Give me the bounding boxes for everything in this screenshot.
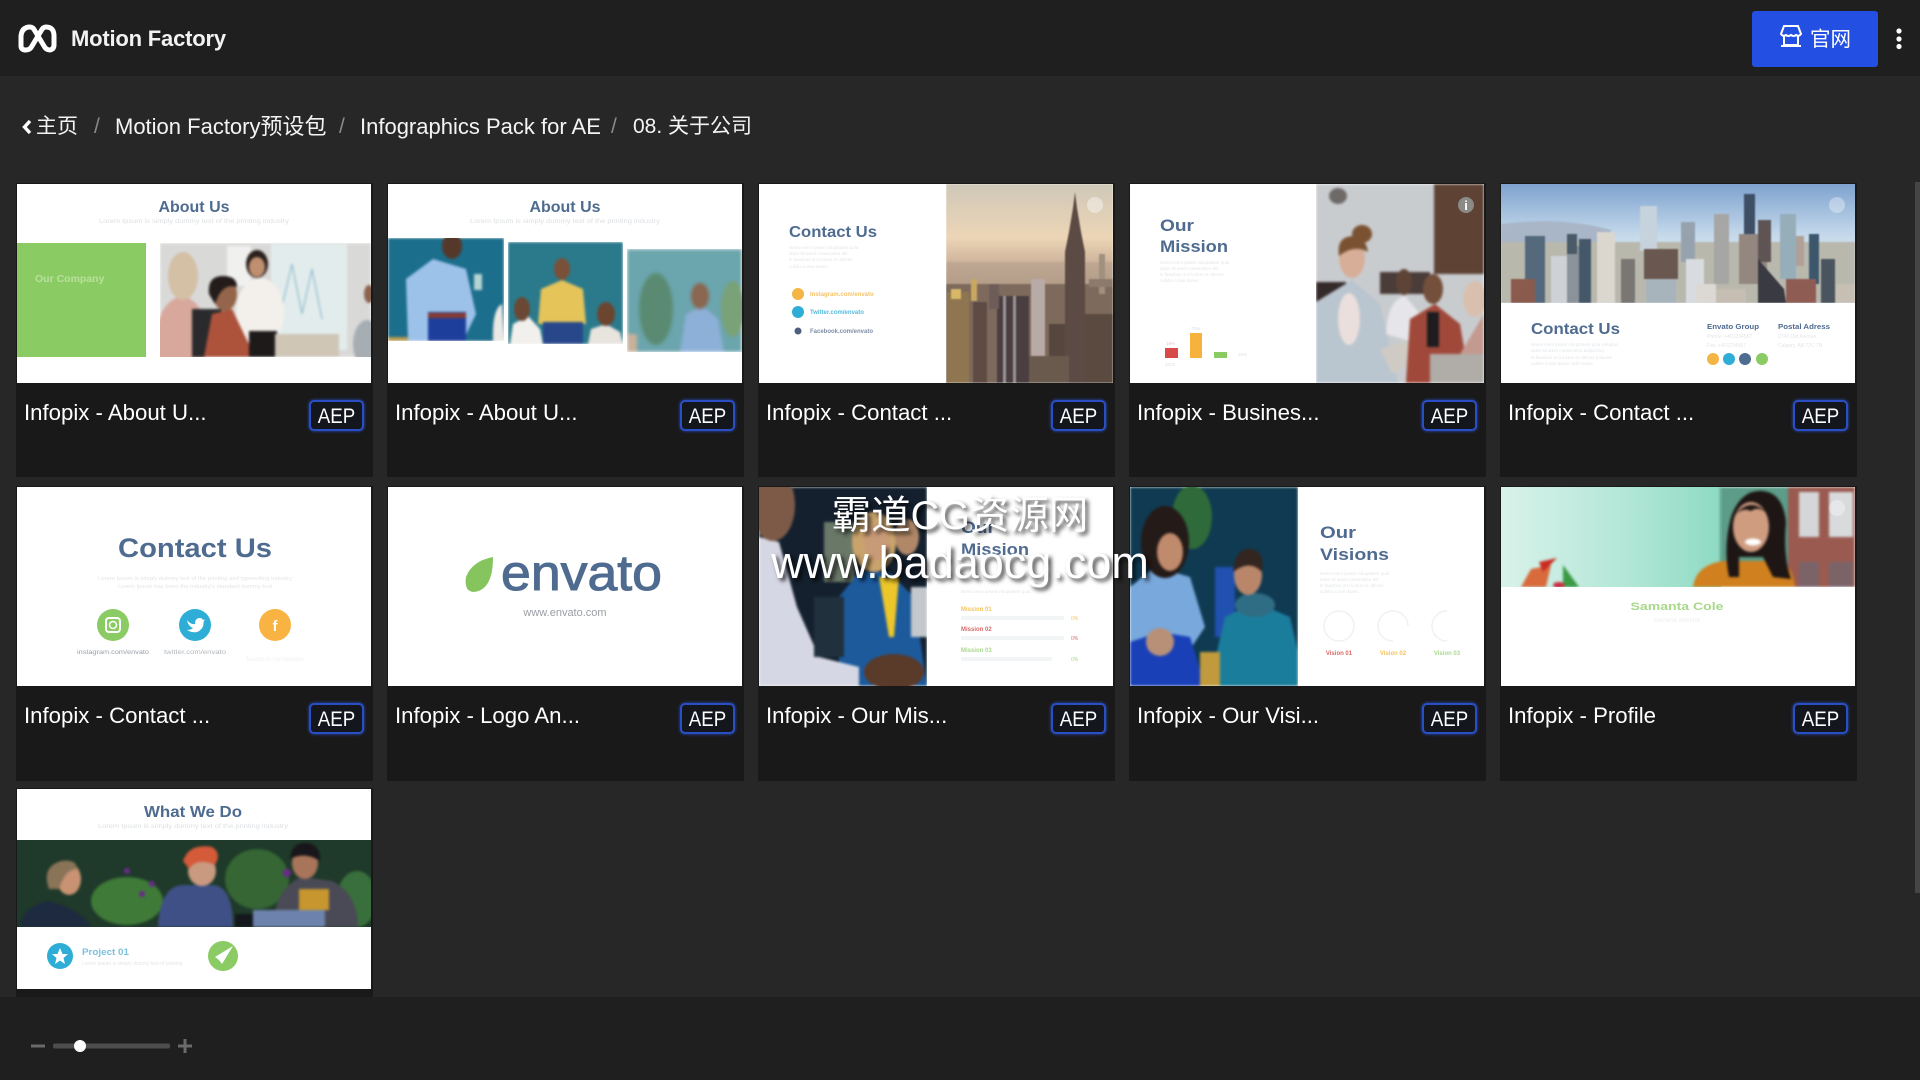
card title: Infopix - Contact ... <box>766 400 952 425</box>
thumbnail: About Us with green panel and meeting photo: Lorem Ipsum is simply dummy text of the printing industry <box>99 219 289 225</box>
thumbnail: Our Visions with rings: dolor sit amet consectetur elit <box>1320 577 1379 582</box>
badge: AEP: AEP <box>318 404 355 428</box>
thumbnail: Contact Us with city panorama: Postal Adress <box>1778 324 1830 331</box>
card title: Infopix - Busines... <box>1137 400 1320 425</box>
badge: AEP <box>1422 703 1477 734</box>
card: Contact 3 <box>16 486 373 781</box>
breadcrumb: Motion Factory预设包 <box>115 114 326 139</box>
thumbnail: Contact Us with skyline photo: Nemo enim ipsam voluptatem quia <box>789 245 859 250</box>
badge: AEP <box>1051 703 1106 734</box>
thumbnail: Our Mission with bars and photo: 2019 <box>1165 362 1176 367</box>
button: official site <box>1752 11 1878 67</box>
badge: AEP: AEP <box>1431 707 1468 731</box>
thumbnail: Contact Us with skyline photo: cubilia curae donec <box>789 264 829 269</box>
thumbnail: Contact Us with city panorama: Envato Group <box>1707 324 1759 331</box>
thumbnail: Contact Us with skyline photo: Twitter.com/envato <box>810 310 864 316</box>
header bar <box>0 0 1920 76</box>
thumbnail: Our Visions with rings: Visions <box>1320 546 1389 564</box>
thumbnail: Contact Us with city panorama: cubilia curae donec velit neque <box>1531 361 1593 366</box>
card: About Us 1 <box>16 183 373 477</box>
card title: Infopix - Our Visi... <box>1137 703 1319 728</box>
card: Logo Animation <box>387 486 744 781</box>
thumbnail: What We Do team photo: What We Do <box>144 804 242 821</box>
thumbnail: Our Mission with bars and photo: 25% <box>1238 352 1247 357</box>
thumbnail: Our Mission with bars and photo: i <box>1464 198 1468 213</box>
thumbnail: Our Visions with rings: Vision 02 <box>1380 651 1407 657</box>
thumbnail: Contact Us with three social icons: instagram.com/envato <box>77 649 149 656</box>
icon: back chevron <box>22 120 32 134</box>
badge: AEP <box>1051 400 1106 431</box>
thumbnail: envato logo: envato <box>501 545 662 601</box>
thumbnail: Contact Us with three social icons <box>17 487 371 686</box>
thumbnail: Our Visions with rings: in faucibus orci luctus et ultrices <box>1320 583 1384 588</box>
thumbnail: What We Do team photo: Lorem Ipsum is simply dummy text of the printing industry <box>98 824 288 830</box>
thumbnail: Our Mission with progress bars: Mission <box>961 541 1029 559</box>
thumbnail: Contact Us with city panorama: Contact Us <box>1531 321 1620 338</box>
icon: store <box>1780 25 1802 47</box>
badge: AEP: AEP <box>318 707 355 731</box>
breadcrumb: 主页 <box>36 115 78 138</box>
thumbnail: Contact Us with city panorama: in faucibus orci luctus et ultrices posuere <box>1531 355 1613 360</box>
thumbnail: Contact Us with city panorama <box>1501 184 1855 383</box>
thumbnail: Contact Us with three social icons: Lorem Ipsum is simply dummy text of the printing and typesetting industry <box>98 576 293 582</box>
card: About Us 2 <box>387 183 744 477</box>
thumbnail: Our Mission with progress bars: Nemo enim ipsam voluptatem quia <box>961 589 1031 594</box>
thumbnail: About Us with green panel and meeting photo: Our Company <box>35 273 105 285</box>
thumbnail: Contact Us with city panorama: 2745 Old Avenue <box>1778 334 1816 340</box>
thumbnail: Contact Us with skyline photo <box>759 184 1113 383</box>
card title: Infopix - Our Mis... <box>766 703 947 728</box>
thumbnail: Contact Us with skyline photo: in faucibus orci luctus et ultrices <box>789 257 853 262</box>
thumbnail: Contact Us with three social icons: Contact Us <box>118 533 272 563</box>
thumbnail: Contact Us with skyline photo: Instagram.com/envato <box>810 292 874 298</box>
thumbnail: Our Mission with progress bars: 0% <box>1071 657 1079 663</box>
thumbnail: About Us with three team photos: About Us <box>530 199 600 216</box>
thumbnail: Our Visions with rings: cubilia curae donec <box>1320 589 1360 594</box>
badge: AEP <box>680 703 735 734</box>
thumbnail: Our Mission with bars and photo <box>1130 184 1484 383</box>
card title: Infopix - Logo An... <box>395 703 580 728</box>
thumbnail: Our Mission with bars and photo: dolor sit amet consectetur elit <box>1160 266 1219 271</box>
thumbnail: Contact Us with three social icons: facebook.com/envato <box>246 657 304 663</box>
badge: AEP <box>309 400 364 431</box>
breadcrumb: / <box>339 115 345 138</box>
thumbnail: envato logo <box>388 487 742 686</box>
thumbnail: Our Visions with rings: Vision 03 <box>1434 651 1461 657</box>
thumbnail: Our Mission with progress bars: 0% <box>1071 616 1079 622</box>
watermark <box>771 494 1152 594</box>
thumbnail: Our Mission with progress bars: Mission 01 <box>961 607 992 613</box>
badge: AEP: AEP <box>1060 707 1097 731</box>
card: What We Do <box>16 788 373 997</box>
thumbnail: Our Mission with bars and photo: Our <box>1160 217 1195 235</box>
thumbnail: Our Mission with progress bars <box>759 487 1113 686</box>
zoom slider <box>31 1039 192 1053</box>
thumbnail: Contact Us with three social icons: Lorem Ipsum has been the industry's standard dummy text <box>118 584 273 590</box>
badge: AEP: AEP <box>1802 707 1839 731</box>
card title: Infopix - About U... <box>395 400 578 425</box>
thumbnail: Our Visions with rings: Vision 01 <box>1326 651 1353 657</box>
thumbnail: About Us with three team photos <box>388 184 742 383</box>
card: Contact 2 <box>1500 183 1857 477</box>
badge: AEP: AEP <box>1431 404 1468 428</box>
thumbnail: What We Do team photo <box>17 789 371 989</box>
thumbnail: Contact Us with skyline photo: Facebook.com/envato <box>810 329 873 335</box>
thumbnail: Contact Us with three social icons: twitter.com/envato <box>164 649 226 656</box>
breadcrumb: / <box>94 115 100 138</box>
card: Our Mission <box>758 486 1115 781</box>
card: Business Mission <box>1129 183 1486 477</box>
badge: AEP: AEP <box>1060 404 1097 428</box>
watermark: www.badaocg.com <box>771 537 1149 588</box>
card: Contact 1 <box>758 183 1115 477</box>
breadcrumb <box>22 114 752 139</box>
thumbnail: Our Mission with bars and photo: Mission <box>1160 238 1228 256</box>
thumbnail: Our Mission with bars and photo: cubilia curae donec <box>1160 278 1200 283</box>
badge: AEP: AEP <box>689 404 726 428</box>
thumbnail: Contact Us with city panorama: Nemo enim ipsam voluptatem quia voluptas <box>1531 342 1619 347</box>
thumbnail: About Us with green panel and meeting photo: About Us <box>158 199 230 216</box>
brand name: Motion Factory <box>71 26 226 51</box>
thumbnail: Our Visions with rings <box>1130 487 1484 686</box>
breadcrumb: 08. 关于公司 <box>633 115 752 138</box>
icon: more menu <box>1896 28 1902 50</box>
thumbnail: About Us with three team photos: Lorem Ipsum is simply dummy text of the printing industry <box>470 219 660 225</box>
card title: Infopix - Contact ... <box>1508 400 1694 425</box>
thumbnail: Our Mission with progress bars: 0% <box>1071 636 1079 642</box>
card: Profile <box>1500 486 1857 781</box>
icon: Motion Factory logo <box>18 24 56 52</box>
card title: Infopix - Profile <box>1508 703 1656 728</box>
card title: Infopix - About U... <box>24 400 207 425</box>
badge: AEP <box>309 703 364 734</box>
card title: Infopix - Contact ... <box>24 703 210 728</box>
thumbnail: Our Mission with progress bars: Mission 02 <box>961 627 992 633</box>
card: Our Visions <box>1129 486 1486 781</box>
thumbnail: Contact Us with skyline photo: Contact Us <box>789 224 877 241</box>
footer bar <box>0 997 1920 1080</box>
thumbnail: Our Mission with bars and photo: 72% <box>1191 326 1200 331</box>
button label: 官网 <box>1810 28 1851 51</box>
thumbnail: Contact Us with city panorama: dolor sit amet consectetur adipiscing <box>1531 348 1604 353</box>
thumbnail: Contact Us with skyline photo: dolor sit amet consectetur elit <box>789 251 848 256</box>
thumbnail: Samanta Cole profile <box>1501 487 1855 686</box>
thumbnail: Samanta Cole profile: General director <box>1654 617 1701 624</box>
badge: AEP <box>1422 400 1477 431</box>
thumbnail: What We Do team photo: Project 01 <box>82 947 129 957</box>
thumbnail: Our Mission with bars and photo: in faucibus orci luctus et ultrices <box>1160 272 1224 277</box>
thumbnail: Our Visions with rings: Nemo enim ipsam voluptatem quia <box>1320 571 1390 576</box>
scrollbar <box>1915 182 1920 893</box>
thumbnail: Our Mission with bars and photo: 16% <box>1166 341 1175 346</box>
thumbnail: Samanta Cole profile: Samanta Cole <box>1630 601 1724 613</box>
breadcrumb: Infographics Pack for AE <box>360 114 601 139</box>
badge: AEP: AEP <box>1802 404 1839 428</box>
thumbnail: What We Do team photo: Lorem Ipsum is simply dummy text of printing <box>82 961 183 967</box>
watermark: 霸道CG资源网 <box>832 494 1088 538</box>
badge: AEP <box>1793 400 1848 431</box>
badge: AEP: AEP <box>689 707 726 731</box>
thumbnail: Contact Us with city panorama: Phone: +401234567 <box>1707 334 1752 340</box>
thumbnail: Our Visions with rings: Our <box>1320 524 1357 542</box>
badge: AEP <box>680 400 735 431</box>
thumbnail: Contact Us with city panorama: Calgary, AB T2C 7B <box>1778 343 1823 349</box>
badge: AEP <box>1793 703 1848 734</box>
thumbnail: envato logo: www.envato.com <box>522 607 607 619</box>
thumbnail: Contact Us with city panorama: Fax: +401234567 <box>1707 343 1746 349</box>
thumbnail: Our Mission with bars and photo: Nemo enim ipsam voluptatem quia <box>1160 260 1230 265</box>
thumbnail: Our Mission with progress bars: Mission 03 <box>961 648 992 654</box>
breadcrumb: / <box>611 115 617 138</box>
thumbnail: Our Mission with progress bars: Our <box>961 519 996 537</box>
thumbnail: About Us with green panel and meeting photo <box>17 184 371 383</box>
thumbnail: Contact Us with three social icons: f <box>272 618 278 635</box>
